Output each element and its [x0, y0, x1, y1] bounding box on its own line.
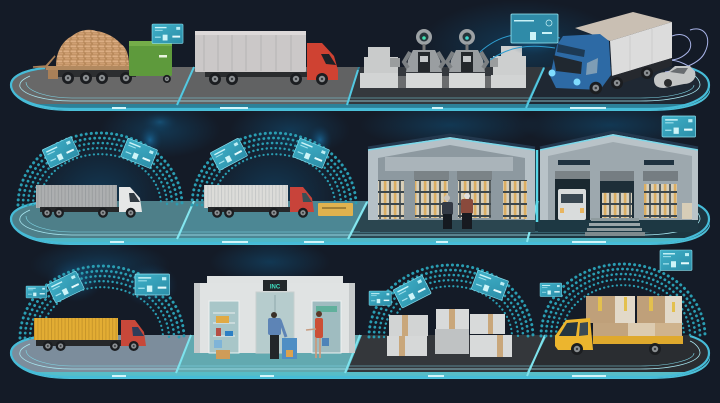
shop door [256, 292, 294, 353]
card warehouse [662, 116, 696, 137]
cards row 2 [42, 136, 330, 171]
warehouse right [538, 132, 698, 236]
row 2 track [10, 200, 710, 245]
cards row 3 right [369, 250, 692, 308]
robot assembly line [360, 29, 526, 88]
blue truck [548, 12, 708, 94]
woman [306, 311, 329, 358]
red truck with white box [195, 31, 338, 85]
shop sign: INC [270, 284, 281, 290]
robot 1 [404, 29, 444, 72]
box on cart [282, 338, 297, 359]
silver car [654, 66, 695, 88]
yellow pallet machine [318, 203, 353, 216]
stairs [585, 218, 645, 236]
cargo truck [555, 296, 683, 355]
data streams and card: factory [480, 14, 565, 60]
docked white truck [558, 189, 586, 220]
machine left [364, 47, 398, 73]
machine right [493, 46, 526, 75]
pellet pile [56, 30, 129, 66]
glowing divider between warehouses [536, 150, 538, 222]
green container [129, 41, 172, 76]
white cartons [387, 309, 512, 357]
cartons on truck [586, 296, 682, 337]
robot 2 [447, 29, 487, 72]
row 1 track [10, 66, 710, 111]
row 3 track [10, 334, 710, 379]
goods crate [216, 350, 230, 359]
card: pellets [152, 24, 183, 43]
workers [442, 193, 473, 229]
white truck row 2 [36, 185, 142, 218]
right shelf window [312, 301, 341, 353]
dock signs [558, 160, 674, 165]
yellow truck row 3 [34, 318, 146, 351]
shop sign [263, 280, 287, 291]
shop building [194, 276, 355, 359]
left shelf window [209, 301, 239, 353]
warehouse left [360, 135, 535, 232]
machine bases [360, 73, 398, 88]
dotted arcs [18, 133, 705, 338]
pellet trailer [33, 30, 172, 84]
man [268, 312, 286, 359]
red truck row 2 [204, 185, 314, 218]
cards row 3 left [26, 271, 170, 303]
